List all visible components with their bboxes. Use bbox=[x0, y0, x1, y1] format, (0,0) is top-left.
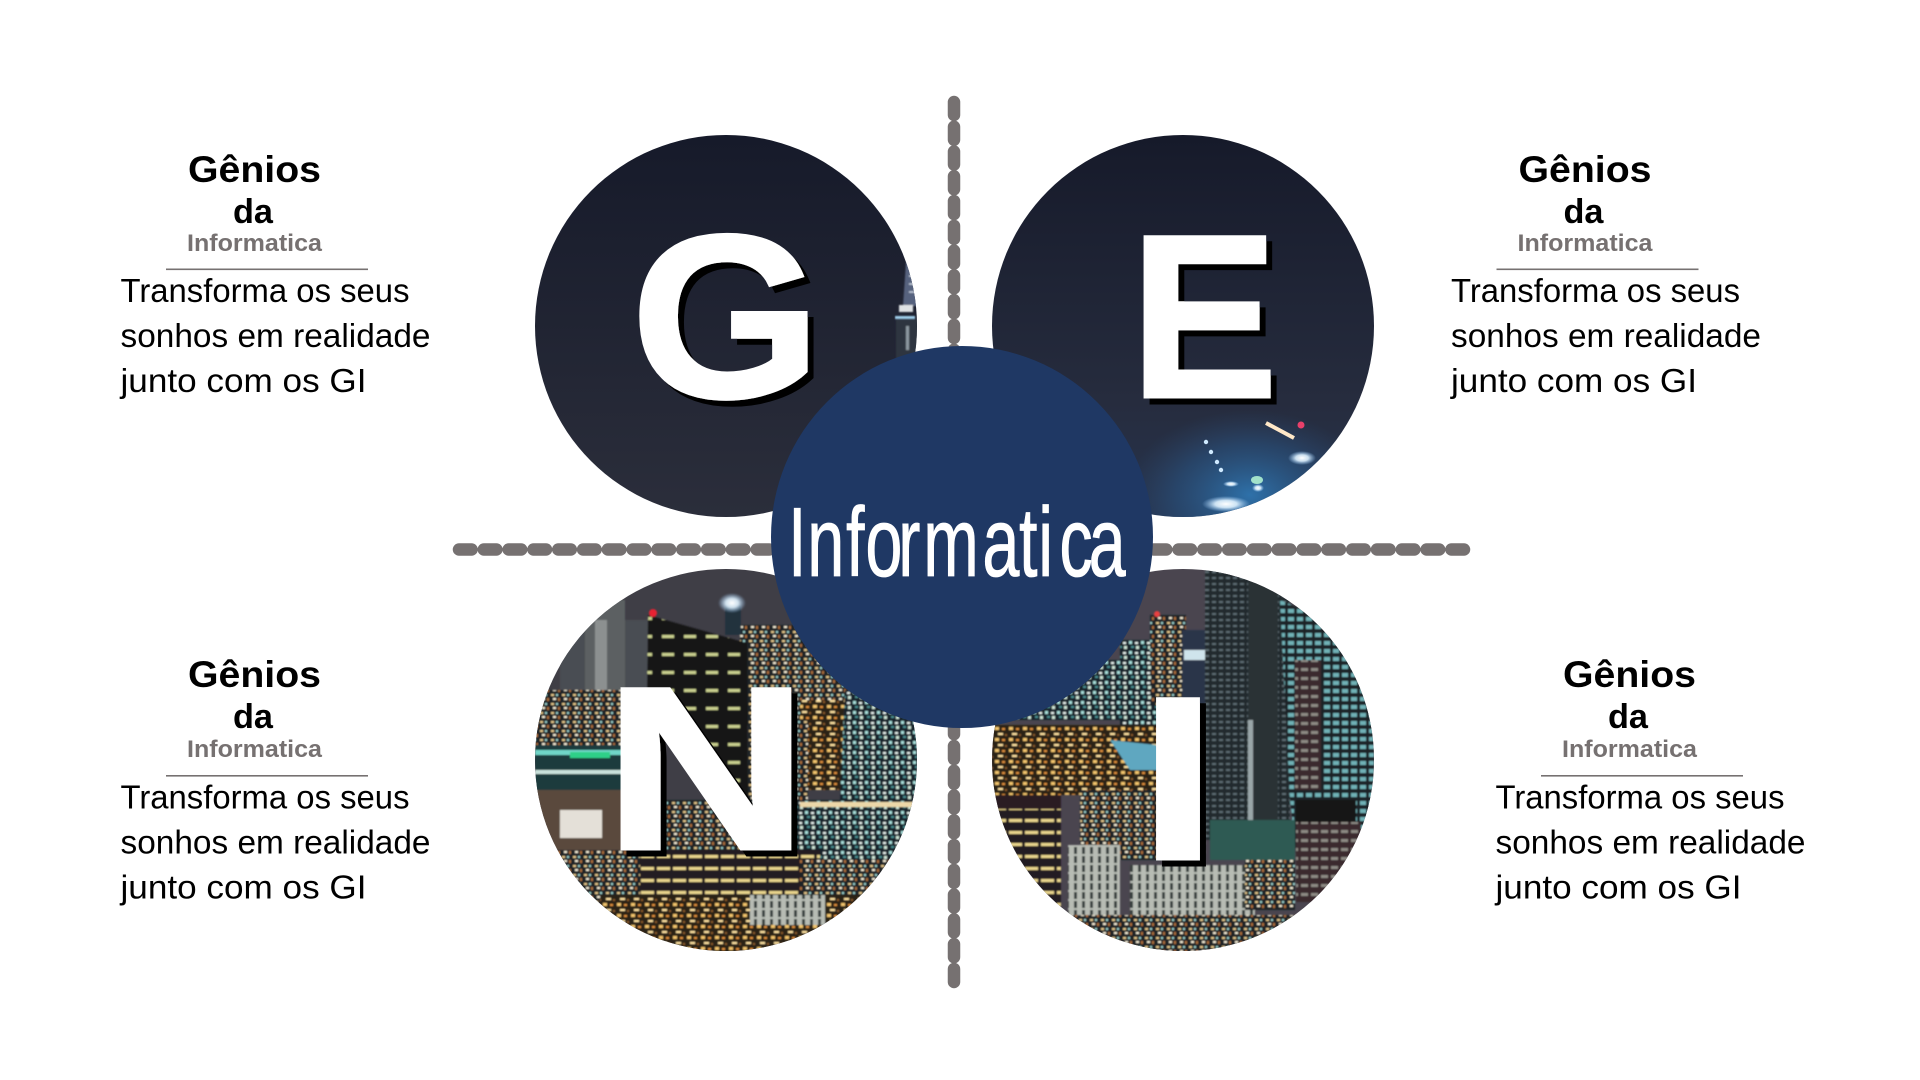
text block: bottom right: Transforma os seus bbox=[1496, 778, 1784, 816]
city photo: I bbox=[992, 570, 1374, 955]
circle: N bbox=[535, 569, 920, 955]
center label: Informatica bbox=[788, 487, 1126, 597]
text block: top right: Transforma os seus bbox=[1451, 272, 1740, 309]
text block: bottom left: Transforma os seus bbox=[120, 778, 410, 816]
text block: top right: Informatica bbox=[1518, 230, 1653, 257]
central circle bbox=[771, 346, 1153, 728]
text block: top left: Informatica bbox=[187, 230, 323, 257]
text block: bottom left bbox=[119, 654, 430, 906]
text block: top left: junto com os GI bbox=[119, 362, 366, 399]
text block: top right: Gênios bbox=[1518, 149, 1652, 190]
text block: bottom right: junto com os GI bbox=[1494, 868, 1741, 906]
icon: distant tower bbox=[895, 262, 918, 360]
text block: top left: da bbox=[233, 193, 274, 231]
icon: crane lights bbox=[1202, 422, 1316, 512]
text block: bottom right: da bbox=[1608, 698, 1649, 736]
dashed horizontal divider bbox=[459, 543, 1464, 556]
circle: I bbox=[992, 569, 1374, 955]
text block: bottom right: sonhos em realidade bbox=[1496, 824, 1806, 860]
circle: G bbox=[535, 135, 918, 517]
text block: top left: Transforma os seus bbox=[120, 272, 410, 309]
text block: bottom left: junto com os GI bbox=[119, 868, 366, 906]
letter I: I bbox=[1139, 648, 1217, 909]
text block: bottom left: sonhos em realidade bbox=[120, 824, 430, 860]
text block: top right bbox=[1450, 149, 1761, 399]
text block: bottom right: Gênios bbox=[1563, 654, 1696, 695]
dashed vertical divider bbox=[948, 102, 960, 982]
letter E: E bbox=[1130, 187, 1278, 447]
text block: top left: Gênios bbox=[188, 149, 321, 190]
infographic canvas bbox=[120, 96, 1804, 988]
circle: E bbox=[992, 135, 1374, 517]
letter N: N bbox=[603, 639, 809, 899]
city photo: N bbox=[535, 593, 920, 955]
text block: bottom left: da bbox=[233, 698, 274, 736]
text block: top right: junto com os GI bbox=[1450, 362, 1697, 399]
text block: top right: sonhos em realidade bbox=[1451, 317, 1761, 354]
letter G: G bbox=[631, 186, 821, 447]
text block: bottom left: Gênios bbox=[188, 654, 321, 695]
text block: bottom right: Informatica bbox=[1562, 736, 1698, 763]
text block: top left bbox=[119, 149, 430, 399]
text block: top right: da bbox=[1564, 193, 1605, 231]
text block: bottom right bbox=[1494, 654, 1806, 906]
text block: top left: sonhos em realidade bbox=[120, 317, 430, 354]
text block: bottom left: Informatica bbox=[187, 736, 323, 763]
